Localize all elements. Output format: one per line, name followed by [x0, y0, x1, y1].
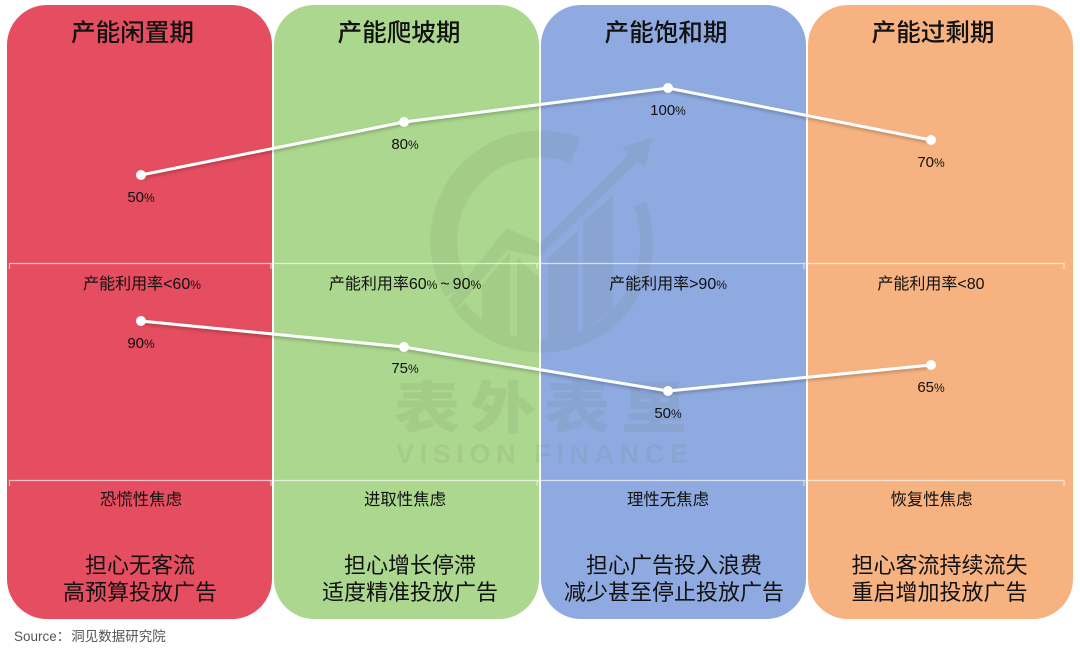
line chart: upper capacity utilisation: 80%	[391, 136, 419, 153]
divider lines	[10, 264, 1064, 486]
utilisation range labels	[83, 275, 985, 293]
advertising behaviour text: 重启增加投放广告	[851, 580, 1028, 605]
anxiety type labels: 恢复性焦虑	[891, 491, 972, 509]
advertising behaviour text	[63, 553, 1028, 605]
advertising behaviour text: 担心广告投入浪费	[586, 553, 762, 578]
anxiety type labels: 理性无焦虑	[627, 491, 709, 509]
panel: capacity idle period	[7, 5, 272, 619]
source note: Source：洞见数据研究院	[14, 629, 166, 644]
line chart: lower anxiety level: 50%	[654, 405, 682, 422]
advertising behaviour text: 高预算投放广告	[63, 580, 217, 605]
line chart: lower anxiety level: 75%	[391, 360, 419, 377]
anxiety type labels	[100, 491, 972, 509]
heading: saturation period: 产能饱和期	[605, 19, 727, 47]
line chart: lower anxiety level: 90%	[127, 335, 155, 352]
line chart: upper capacity utilisation: 100%	[650, 102, 686, 119]
watermark wordmark: 表外表里	[394, 363, 687, 444]
panel: capacity saturation period	[541, 5, 806, 619]
watermark english: VISION FINANCE	[396, 439, 688, 469]
panel: capacity surplus period	[808, 5, 1073, 619]
line chart: upper capacity utilisation: 70%	[917, 154, 945, 171]
panel: capacity ramp-up period	[274, 5, 539, 619]
line chart: lower anxiety level: 65%	[917, 379, 945, 396]
heading: idle period: 产能闲置期	[71, 19, 194, 47]
anxiety type labels: 进取性焦虑	[364, 491, 446, 509]
advertising behaviour text: 减少甚至停止投放广告	[564, 580, 784, 605]
advertising behaviour text: 担心无客流	[85, 553, 195, 578]
utilisation range labels: 产能利用率<80	[877, 275, 985, 293]
line chart: upper capacity utilisation	[127, 83, 945, 206]
heading: ramp-up period: 产能爬坡期	[338, 19, 460, 47]
advertising behaviour text: 担心客流持续流失	[851, 553, 1028, 578]
utilisation range labels: 产能利用率<60%	[83, 275, 201, 293]
utilisation range labels: 产能利用率60%~90%	[329, 275, 481, 293]
heading: surplus period: 产能过剩期	[872, 19, 994, 47]
anxiety type labels: 恐慌性焦虑	[100, 491, 182, 509]
advertising behaviour text: 适度精准投放广告	[322, 580, 498, 605]
watermark logo	[394, 138, 688, 469]
line chart: upper capacity utilisation: 50%	[127, 189, 155, 206]
line chart: lower anxiety level	[127, 316, 945, 422]
utilisation range labels: 产能利用率>90%	[609, 275, 727, 293]
advertising behaviour text: 担心增长停滞	[344, 553, 476, 578]
